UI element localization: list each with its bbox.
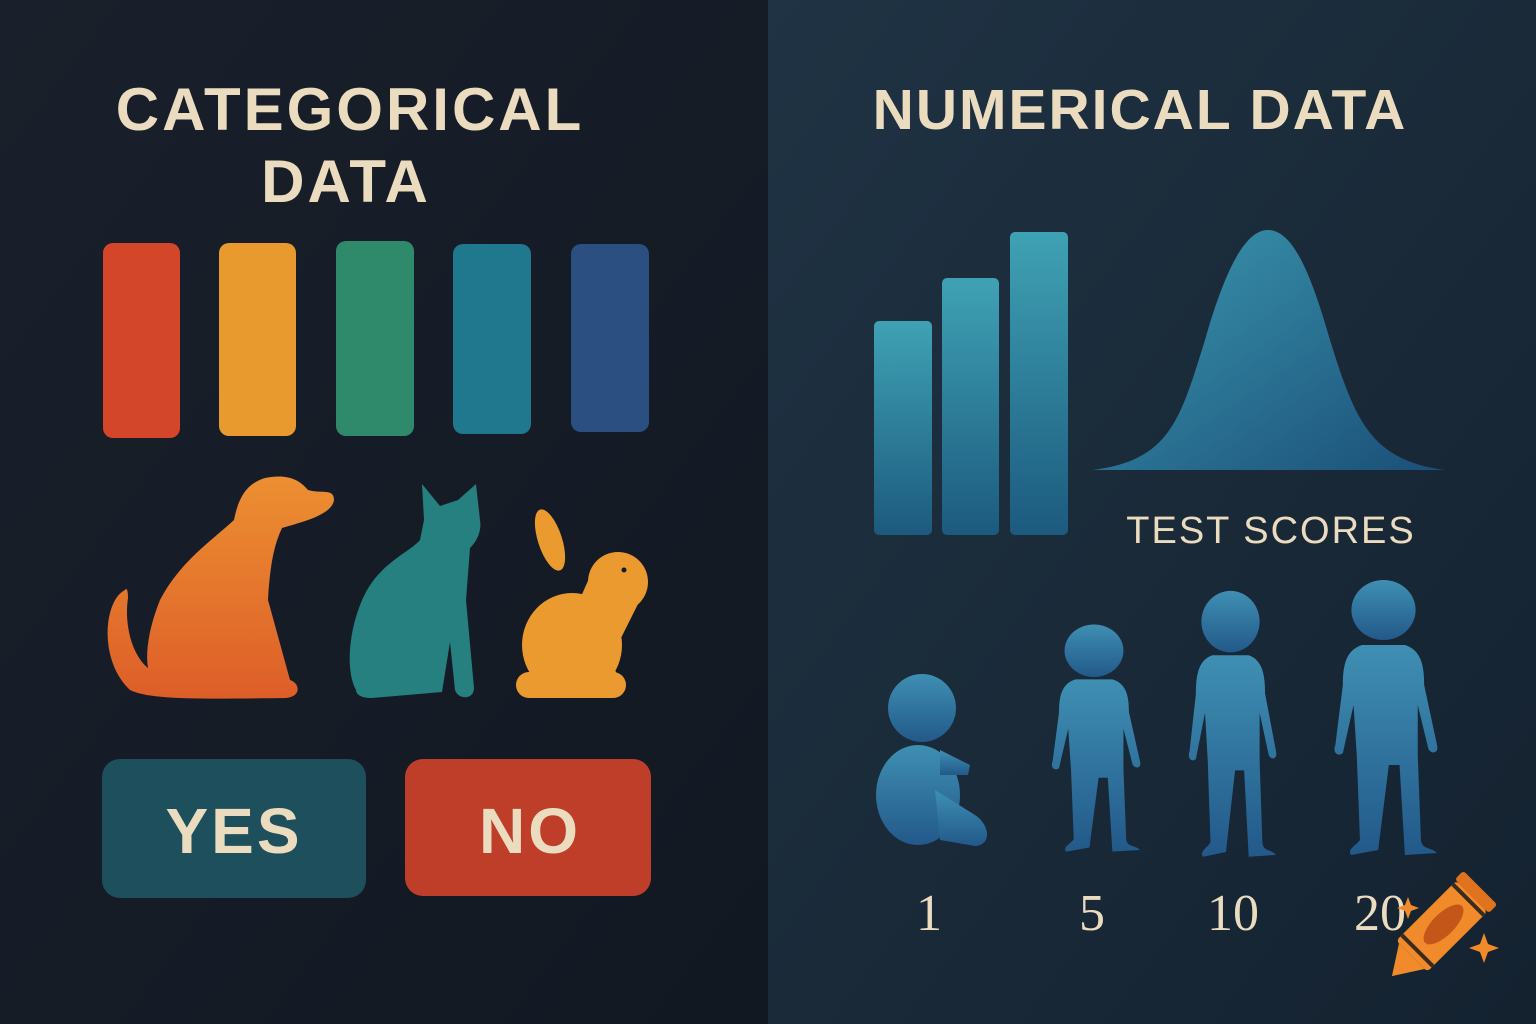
button: no: NO	[479, 795, 581, 867]
age labels: 1	[916, 885, 942, 942]
age labels: 5	[1079, 885, 1105, 942]
panel: numerical background	[768, 0, 1536, 1024]
label: test scores: TEST SCORES	[1126, 510, 1416, 552]
color swatches	[103, 241, 649, 438]
icon: baby	[876, 674, 987, 846]
age labels: 10	[1207, 885, 1259, 942]
button: no	[405, 759, 651, 896]
button: yes	[102, 759, 366, 898]
people: age silhouettes	[876, 580, 1437, 857]
icon: crayon	[1375, 871, 1497, 993]
title: numerical data: NUMERICAL DATA	[873, 78, 1407, 142]
icon: dog	[108, 476, 334, 699]
icon: child age 10	[1189, 591, 1276, 857]
title: categorical data: CATEGORICAL	[116, 76, 584, 143]
panel: categorical background	[0, 0, 768, 1024]
icon: child age 5	[1052, 624, 1140, 852]
title: categorical data	[116, 76, 584, 215]
age labels: 20	[1354, 885, 1406, 942]
title: categorical data: DATA	[261, 148, 431, 215]
bar chart	[874, 232, 1068, 535]
icon: sparkles	[1397, 897, 1499, 963]
button: yes: YES	[165, 795, 303, 867]
chart: bell curve	[1093, 230, 1445, 470]
icon: cat	[350, 484, 480, 698]
age labels	[916, 885, 1406, 942]
icon: rabbit	[516, 506, 648, 698]
icon: adult age 20	[1334, 580, 1437, 855]
